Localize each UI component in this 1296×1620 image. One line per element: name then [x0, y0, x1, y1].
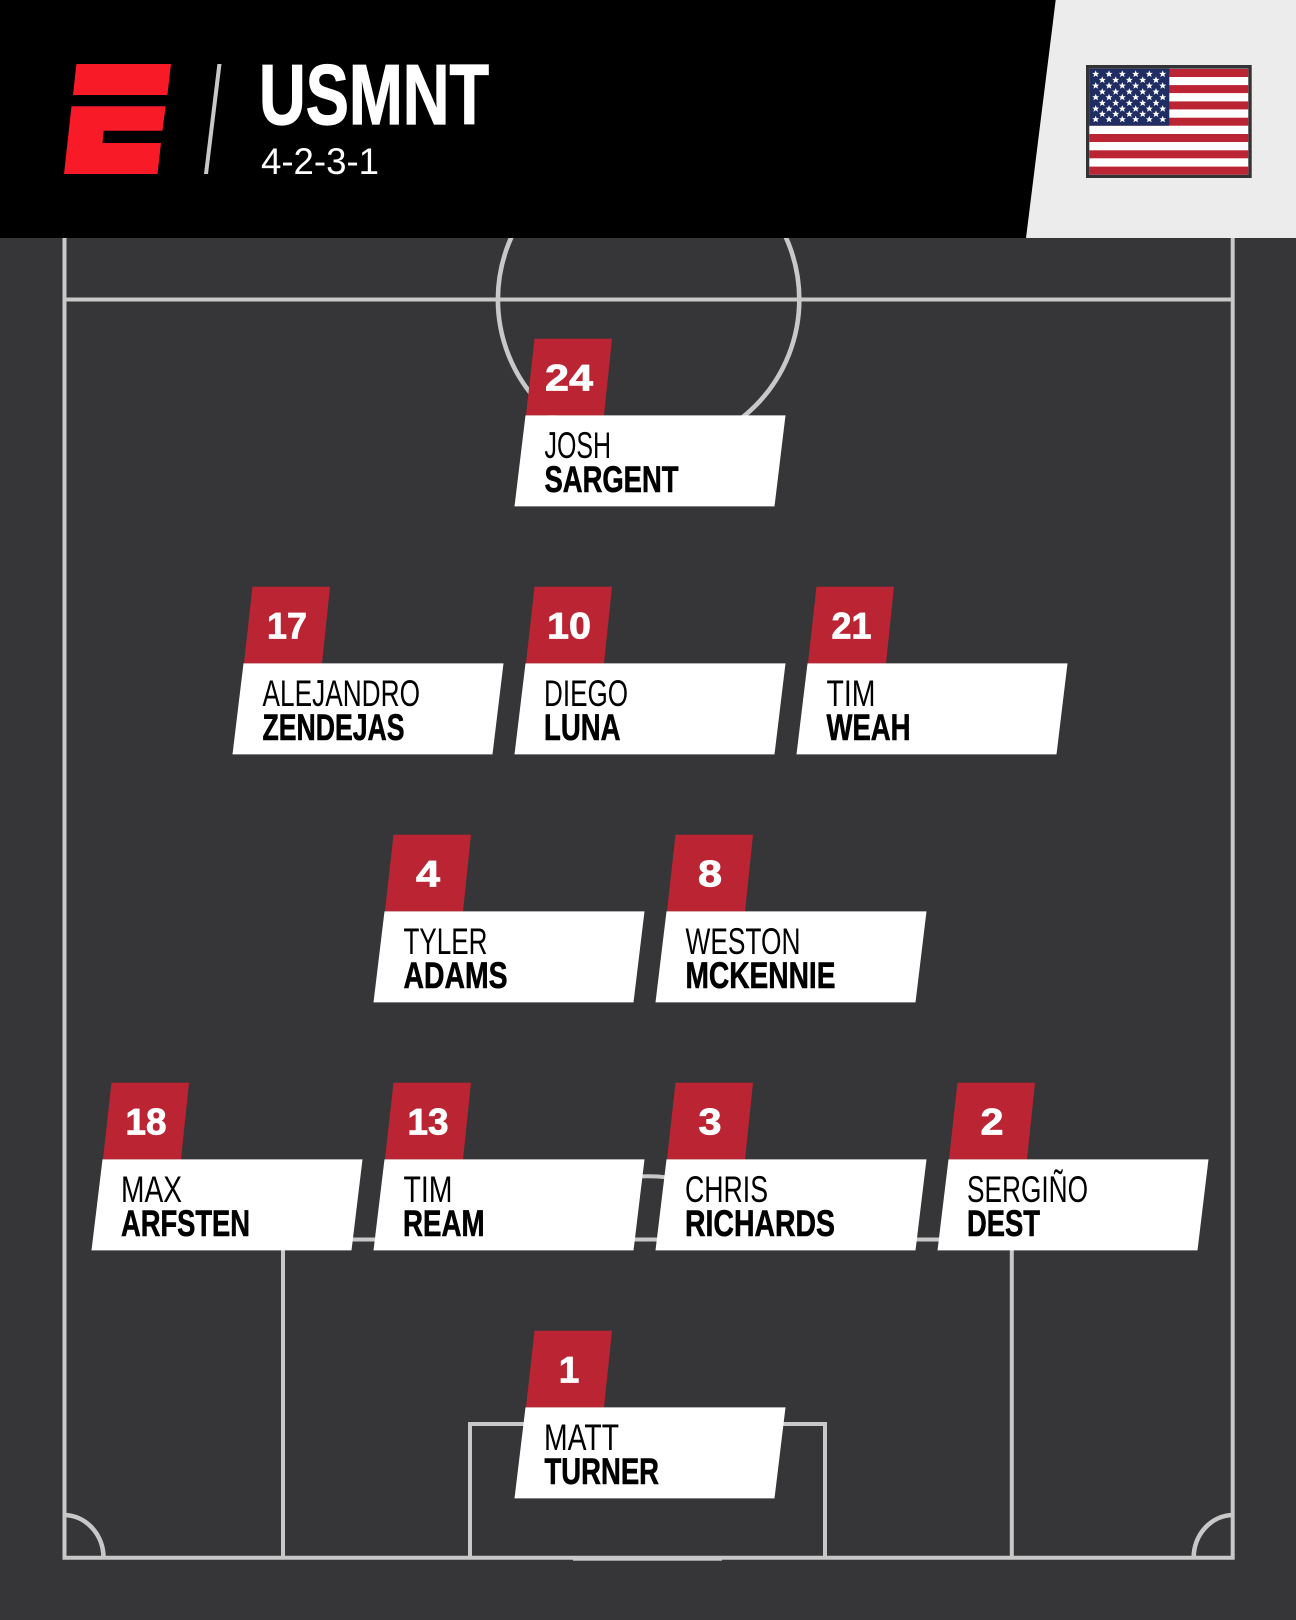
- player card: Max Arfsten: MAX: [121, 1168, 182, 1210]
- player card: Tim Weah: [796, 587, 1068, 754]
- player card: Sergino Dest: SERGIÑO: [967, 1168, 1088, 1210]
- player card: Alejandro Zendejas: ALEJANDRO: [262, 672, 420, 714]
- player card: Tyler Adams: [374, 835, 644, 1002]
- icon: ESPN E logo: [64, 64, 171, 174]
- player card: Matt Turner: TURNER: [544, 1450, 659, 1492]
- player card: Matt Turner: MATT: [544, 1416, 619, 1458]
- player card: Sergino Dest: 2: [980, 1102, 1004, 1143]
- player card: Weston McKennie: MCKENNIE: [686, 954, 836, 996]
- player card: Tim Ream: 13: [408, 1102, 448, 1143]
- player card: Josh Sargent: 24: [545, 358, 593, 399]
- player card: Alejandro Zendejas: [232, 587, 504, 754]
- header bar: [0, 0, 1296, 238]
- player card: Chris Richards: RICHARDS: [685, 1202, 835, 1244]
- player card: Chris Richards: 3: [698, 1102, 722, 1143]
- player card: Weston McKennie: WESTON: [686, 920, 800, 962]
- player card: Tyler Adams: 4: [416, 854, 440, 895]
- player card: Tim Weah: TIM: [826, 672, 876, 714]
- player card: Josh Sargent: SARGENT: [544, 458, 679, 500]
- player card: Weston McKennie: 8: [698, 854, 722, 895]
- player card: Matt Turner: [514, 1331, 786, 1498]
- player card: Chris Richards: [656, 1083, 926, 1250]
- player card: Josh Sargent: JOSH: [544, 424, 611, 466]
- player card: Chris Richards: CHRIS: [685, 1168, 768, 1210]
- player card: Diego Luna: 10: [547, 606, 591, 647]
- player card: Max Arfsten: [92, 1083, 362, 1250]
- slash divider: [204, 64, 222, 174]
- player card: Tyler Adams: TYLER: [404, 920, 488, 962]
- player card: Max Arfsten: ARFSTEN: [121, 1202, 250, 1244]
- player card: Josh Sargent: [514, 339, 786, 506]
- player card: Alejandro Zendejas: ZENDEJAS: [262, 706, 404, 748]
- player card: Tim Weah: 21: [832, 606, 872, 647]
- icon: US flag: [1086, 65, 1252, 178]
- player card: Diego Luna: LUNA: [544, 706, 620, 748]
- title: USMNT: [259, 48, 489, 143]
- pitch markings: [64, 149, 1233, 1561]
- player card: Tim Ream: [374, 1083, 644, 1250]
- player card: Sergino Dest: [938, 1083, 1208, 1250]
- player card: Matt Turner: 1: [559, 1350, 579, 1391]
- player card: Sergino Dest: DEST: [967, 1202, 1040, 1244]
- player card: Alejandro Zendejas: 17: [267, 606, 307, 647]
- formation: 4-2-3-1: [261, 141, 379, 182]
- player card: Tim Ream: REAM: [403, 1202, 484, 1244]
- player card: Max Arfsten: 18: [126, 1102, 166, 1143]
- player card: Tim Ream: TIM: [404, 1168, 452, 1210]
- player card: Diego Luna: [514, 587, 786, 754]
- player card: Diego Luna: DIEGO: [544, 672, 628, 714]
- player card: Tyler Adams: ADAMS: [404, 954, 508, 996]
- player card: Tim Weah: WEAH: [826, 706, 910, 748]
- player card: Weston McKennie: [656, 835, 926, 1002]
